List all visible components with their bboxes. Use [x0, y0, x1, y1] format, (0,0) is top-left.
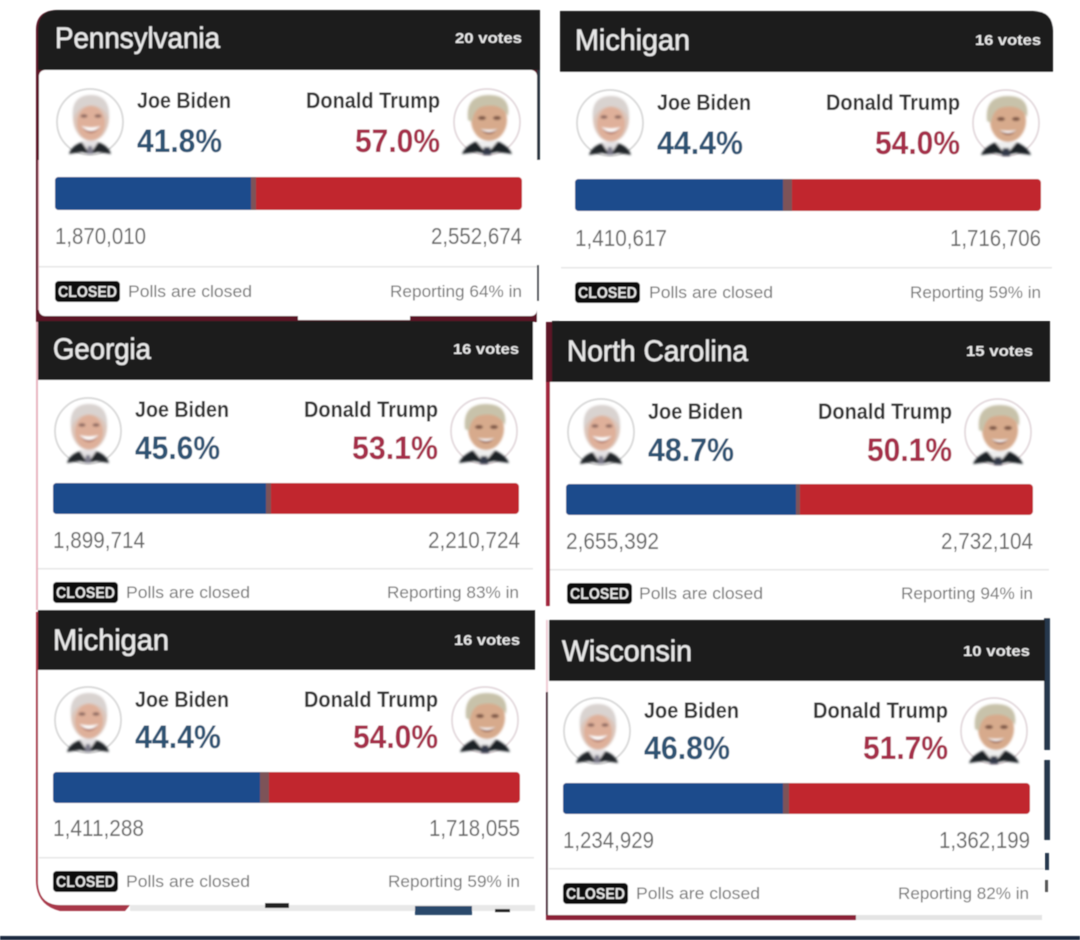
Biden name: Joe Biden — [648, 399, 743, 424]
icon: Trump portrait — [451, 398, 517, 464]
reporting: Reporting 82% in — [898, 884, 1029, 903]
panel: Michigan top — [560, 11, 1053, 320]
Trump votes: 1,716,706 — [950, 225, 1041, 251]
closed badge: CLOSED — [58, 284, 117, 301]
Biden votes: 1,870,010 — [55, 223, 146, 249]
icon: Trump portrait — [454, 89, 520, 155]
icon: Biden portrait — [577, 90, 643, 156]
Trump votes: 2,210,724 — [428, 527, 520, 553]
Trump percent: 51.7% — [863, 730, 948, 766]
Trump percent: 54.0% — [875, 125, 960, 161]
vote share bar — [55, 177, 522, 210]
electoral votes: 20 votes — [455, 30, 522, 47]
panel: Wisconsin — [546, 618, 1050, 920]
state heading: Wisconsin — [562, 635, 692, 668]
state heading: Pennsylvania — [55, 22, 220, 55]
polls status: Polls are closed — [636, 884, 760, 903]
panel: Georgia — [36, 321, 534, 610]
Trump percent: 50.1% — [867, 432, 952, 468]
icon: Biden portrait — [55, 687, 121, 753]
vote share bar — [53, 772, 520, 803]
closed badge: CLOSED — [56, 874, 115, 891]
state heading: Georgia — [53, 333, 151, 366]
Biden percent: 48.7% — [648, 432, 734, 468]
reporting: Reporting 83% in — [387, 583, 519, 602]
Biden name: Joe Biden — [137, 88, 231, 113]
Trump name: Donald Trump — [818, 399, 952, 424]
electoral votes: 16 votes — [454, 632, 520, 649]
polls status: Polls are closed — [639, 584, 763, 603]
Trump name: Donald Trump — [813, 698, 948, 723]
Biden votes: 1,899,714 — [53, 527, 145, 553]
electoral votes: 16 votes — [975, 32, 1041, 49]
Biden votes: 1,411,288 — [53, 815, 144, 841]
polls status: Polls are closed — [126, 583, 250, 602]
Trump percent: 57.0% — [355, 123, 440, 159]
icon: Trump portrait — [973, 90, 1039, 156]
Trump percent: 53.1% — [352, 430, 438, 466]
Trump percent: 54.0% — [353, 719, 438, 755]
Biden votes: 1,410,617 — [575, 225, 667, 251]
Biden percent: 46.8% — [644, 730, 730, 766]
electoral votes: 16 votes — [453, 341, 519, 358]
state heading: North Carolina — [567, 335, 748, 368]
icon: Biden portrait — [568, 399, 634, 465]
Trump votes: 1,362,199 — [939, 827, 1030, 853]
Biden percent: 44.4% — [657, 125, 743, 161]
electoral votes: 10 votes — [963, 643, 1030, 660]
reporting: Reporting 94% in — [901, 584, 1033, 603]
Biden percent: 45.6% — [135, 430, 220, 466]
closed badge: CLOSED — [570, 586, 629, 603]
Trump votes: 2,552,674 — [431, 223, 522, 249]
polls status: Polls are closed — [128, 282, 252, 301]
vote share bar — [53, 483, 519, 514]
reporting: Reporting 59% in — [388, 872, 520, 891]
Biden percent: 44.4% — [135, 719, 221, 755]
polls status: Polls are closed — [649, 283, 773, 302]
Trump name: Donald Trump — [304, 687, 438, 712]
icon: Trump portrait — [452, 687, 518, 753]
state heading: Michigan — [53, 624, 169, 657]
closed badge: CLOSED — [56, 585, 115, 602]
panel: Michigan bottom — [36, 610, 535, 915]
Biden votes: 2,655,392 — [566, 528, 659, 554]
icon: Biden portrait — [57, 89, 123, 155]
Biden name: Joe Biden — [657, 90, 751, 115]
reporting: Reporting 64% in — [390, 282, 522, 301]
icon: Trump portrait — [965, 399, 1031, 465]
Trump name: Donald Trump — [826, 90, 960, 115]
polls status: Polls are closed — [126, 872, 250, 891]
panel: Pennsylvania — [36, 10, 540, 322]
icon: Biden portrait — [55, 398, 121, 464]
electoral votes: 15 votes — [966, 343, 1033, 360]
closed badge: CLOSED — [578, 285, 637, 302]
reporting: Reporting 59% in — [910, 283, 1041, 302]
bottom edge strip — [0, 936, 1080, 940]
panel: North Carolina — [546, 321, 1050, 618]
icon: Biden portrait — [564, 698, 630, 764]
vote share bar — [563, 783, 1030, 814]
Trump name: Donald Trump — [304, 397, 438, 422]
icon: Trump portrait — [961, 698, 1027, 764]
Biden name: Joe Biden — [644, 698, 739, 723]
Trump votes: 2,732,104 — [941, 528, 1033, 554]
state heading: Michigan — [575, 24, 690, 57]
vote share bar — [575, 179, 1041, 211]
Biden votes: 1,234,929 — [563, 827, 654, 853]
vote share bar — [566, 484, 1033, 515]
Biden name: Joe Biden — [135, 397, 229, 422]
Trump votes: 1,718,055 — [429, 815, 520, 841]
Biden percent: 41.8% — [137, 123, 222, 159]
Trump name: Donald Trump — [306, 88, 440, 113]
Biden name: Joe Biden — [135, 687, 229, 712]
closed badge: CLOSED — [566, 886, 625, 903]
